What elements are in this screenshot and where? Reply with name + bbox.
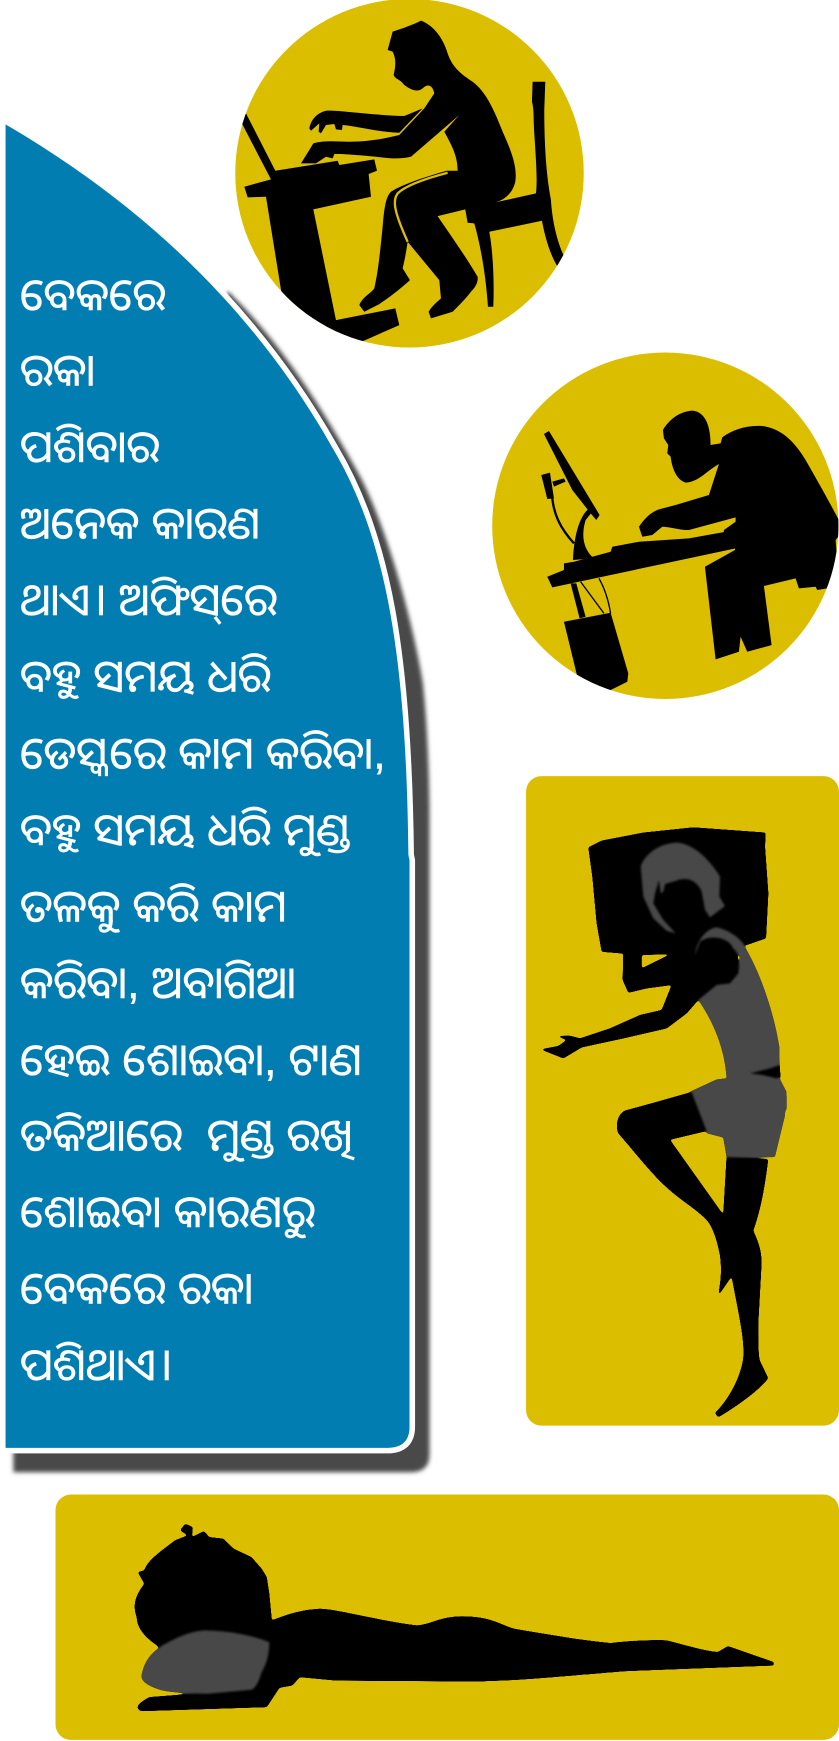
text: neck pain causes in Odia: ଡେସ୍କରେ କାମ କରିବା, <box>20 729 386 778</box>
text: neck pain causes in Odia: ବେକରେ <box>20 271 166 320</box>
text: neck pain causes in Odia: ବହୁ ସମୟ ଧରି ମୁଣ୍ଡ <box>20 806 351 856</box>
text: neck pain causes in Odia: ପଶିଥାଏ। <box>20 1341 172 1390</box>
text: neck pain causes in Odia: ରକା <box>20 346 95 395</box>
icon: woman sleeping on her side on yellow panel <box>526 776 839 1426</box>
text: neck pain causes in Odia: ହେଇ ଶୋଇବା, ଟାଣ <box>20 1036 362 1085</box>
text: neck pain causes in Odia: କରିବା, ଅବାଗିଆ <box>20 959 296 1008</box>
text: neck pain causes in Odia <box>20 271 386 1390</box>
text: neck pain causes in Odia: ଥାଏ। ଅଫିସ୍‌ରେ <box>20 576 277 625</box>
panel: blue text panel with shadow <box>6 124 429 1472</box>
text: neck pain causes in Odia: ବେକରେ ରକା <box>20 1265 253 1314</box>
text: neck pain causes in Odia: ପଶିବାର <box>20 423 160 472</box>
text: neck pain causes in Odia: ତକିଆରେ ମୁଣ୍ଡ ରଖି <box>20 1111 355 1161</box>
icon: hunched man at computer in yellow circle <box>492 353 839 699</box>
text: neck pain causes in Odia: ବହୁ ସମୟ ଧରି <box>20 653 271 702</box>
text: neck pain causes in Odia: ତଳକୁ କରି କାମ <box>20 883 287 933</box>
text: neck pain causes in Odia: ଅନେକ କାରଣ <box>20 500 260 549</box>
text: neck pain causes in Odia: ଶୋଇବା କାରଣରୁ <box>20 1188 315 1238</box>
icon: person lying on stomach on yellow panel <box>55 1495 839 1740</box>
icon: man typing at desk in yellow circle <box>235 0 584 350</box>
